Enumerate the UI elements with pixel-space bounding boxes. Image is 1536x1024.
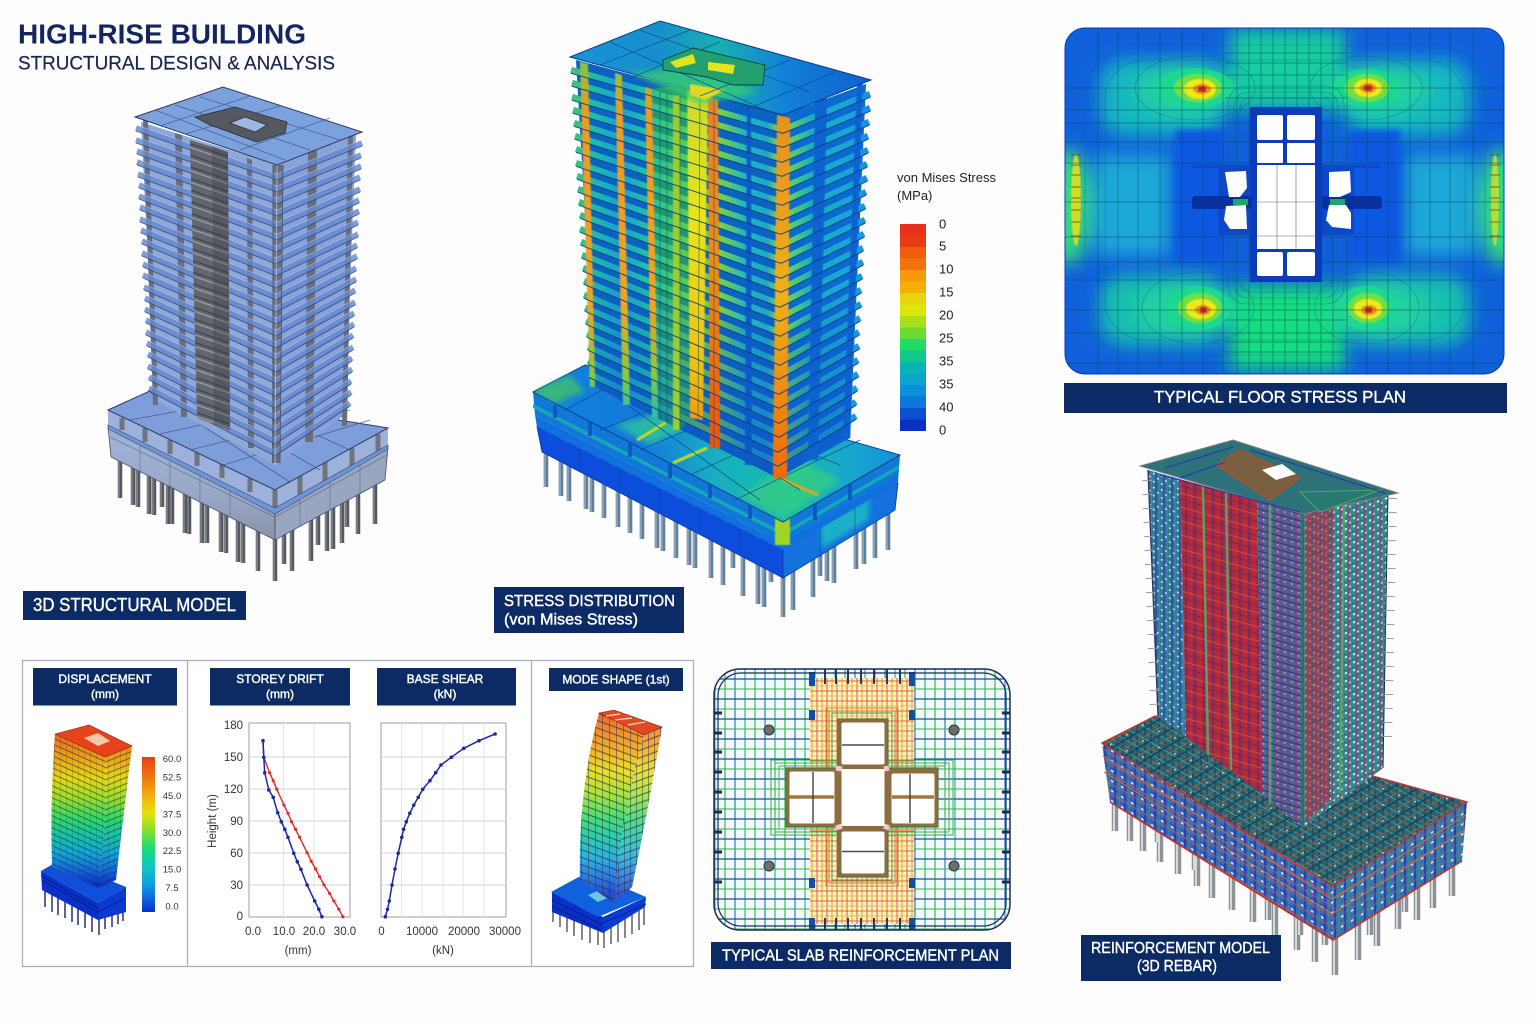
tower rebar cage <box>1148 470 1388 828</box>
y axis ticks <box>224 720 243 923</box>
label: typical floor stress plan <box>1064 383 1507 413</box>
slab wire ticks <box>1147 480 1392 750</box>
legend values: 40 <box>939 400 953 414</box>
outer left strip <box>1148 470 1186 737</box>
legend title: von Mises Stress <box>897 170 996 185</box>
results panel <box>22 660 694 966</box>
y axis ticks: 60 <box>230 848 243 860</box>
stress contour field <box>1044 28 1526 374</box>
podium roof cage <box>1102 716 1467 886</box>
header: storey drift: (mm) <box>266 687 294 701</box>
green vertical bars <box>1203 486 1344 828</box>
label: typical floor stress plan: TYPICAL FLOOR STRESS PLAN <box>1154 388 1406 406</box>
3D reinforcement model <box>1102 440 1467 975</box>
legend values: 0 <box>939 422 946 438</box>
legend values <box>939 216 953 438</box>
podium floor slabs <box>533 392 900 550</box>
roof slab with hot core <box>570 21 871 115</box>
right face <box>1303 491 1388 828</box>
legend values: 10 <box>939 262 953 276</box>
roof slab with core opening <box>135 87 362 165</box>
label: stress distribution: (von Mises Stress) <box>504 612 638 628</box>
x axis ticks: 0 <box>378 926 385 938</box>
displacement scale values: 22.5 <box>163 846 181 857</box>
podium roof with stress field <box>533 365 900 522</box>
legend color bar <box>900 224 926 431</box>
legend title: (MPa) <box>897 188 932 203</box>
y axis ticks: 30 <box>230 880 243 892</box>
legend values: 15 <box>939 284 953 300</box>
header: storey drift <box>210 668 350 706</box>
label: reinforcement model: REINFORCEMENT MODEL <box>1091 940 1270 957</box>
lower podium slab and columns <box>108 410 388 514</box>
displacement color bar <box>142 757 155 912</box>
legend title <box>897 170 996 203</box>
y axis ticks: 180 <box>224 720 243 732</box>
x axis ticks: 10.0 <box>273 926 295 938</box>
mode shape tower <box>551 710 662 948</box>
right red strip <box>1305 506 1333 822</box>
foundation piles <box>1114 771 1452 975</box>
legend values: 5 <box>939 238 946 254</box>
header: displacement <box>33 668 177 706</box>
base shear curve <box>385 734 495 917</box>
displacement tower model <box>41 725 132 935</box>
core shaft <box>1192 107 1382 282</box>
displacement scale values: 7.5 <box>165 883 179 894</box>
mixed strip <box>1257 500 1303 828</box>
tower body <box>571 60 870 478</box>
displacement scale values <box>163 754 181 912</box>
y axis ticks: 90 <box>230 816 243 828</box>
label: stress distribution <box>494 587 684 633</box>
basement box <box>108 427 388 540</box>
podium side cages <box>1102 743 1467 940</box>
legend values: 0 <box>939 216 946 232</box>
central core wall <box>190 140 230 430</box>
displacement scale values: 0.0 <box>165 902 179 912</box>
stressed columns <box>580 62 863 478</box>
label: typical slab reinforcement plan: TYPICAL SLAB REINFORCEMENT PLAN <box>722 948 999 964</box>
stress distribution building <box>533 21 900 617</box>
edge column ties <box>812 672 912 930</box>
nested rebar rings <box>771 708 953 886</box>
tower roof cage <box>1140 440 1398 514</box>
blue drift curve <box>263 741 322 917</box>
legend values: 35 <box>939 376 953 392</box>
header: base shear: BASE SHEAR <box>407 672 484 686</box>
structural grid lines <box>1065 28 1504 374</box>
y axis ticks: 120 <box>224 784 243 796</box>
y axis ticks: 0 <box>237 911 243 923</box>
floor slabs colored by stress <box>571 70 870 463</box>
x axis ticks: 20000 <box>448 926 480 938</box>
red core strip <box>1180 479 1262 794</box>
x axis ticks: 30000 <box>489 926 521 938</box>
legend values: 25 <box>939 330 953 346</box>
podium wire frame <box>1103 756 1466 914</box>
header: displacement: DISPLACEMENT <box>58 672 152 686</box>
base shear chart <box>378 723 521 957</box>
x axis ticks: 0.0 <box>245 926 261 938</box>
core walls with openings <box>786 719 938 877</box>
label: reinforcement model <box>1081 935 1281 981</box>
header: mode shape: MODE SHAPE (1st) <box>562 672 670 686</box>
height axis label: Height (m) <box>207 794 219 848</box>
header: base shear: (kN) <box>434 687 456 701</box>
header: mode shape <box>549 668 683 691</box>
tower columns <box>143 120 353 463</box>
main title: HIGH-RISE BUILDING <box>18 18 306 50</box>
displacement scale values: 45.0 <box>163 791 181 802</box>
header: displacement: (mm) <box>91 687 119 701</box>
slab outline <box>714 669 1010 930</box>
header: base shear <box>377 668 516 706</box>
x axis ticks: 20.0 <box>303 926 325 938</box>
displacement scale values: 52.5 <box>163 772 181 784</box>
header: storey drift: STOREY DRIFT <box>236 672 324 686</box>
typical slab reinforcement plan <box>714 669 1010 932</box>
displacement scale values: 30.0 <box>163 828 181 839</box>
legend values: 35 <box>939 354 953 368</box>
foundation piles <box>119 438 375 581</box>
x axis ticks <box>378 926 521 938</box>
label: 3D structural model: 3D STRUCTURAL MODEL <box>33 595 236 615</box>
storey drift chart <box>207 720 356 957</box>
label: typical slab reinforcement plan <box>711 942 1011 969</box>
3D structural model building <box>108 87 388 581</box>
tower body <box>136 120 362 465</box>
central orange rebar strip <box>810 678 914 924</box>
displacement scale values: 37.5 <box>163 810 181 820</box>
basement box <box>537 427 898 578</box>
stress hot spots <box>1071 68 1499 330</box>
title block <box>18 18 335 74</box>
corner columns <box>764 725 959 871</box>
displacement scale values: 15.0 <box>163 864 181 876</box>
subtitle: STRUCTURAL DESIGN & ANALYSIS <box>18 54 335 74</box>
side rebar ticks <box>1071 155 1500 236</box>
x axis ticks: 30.0 <box>334 926 356 938</box>
legend values: 20 <box>939 308 953 322</box>
x axis ticks <box>245 926 356 938</box>
slab rebar field <box>714 669 1010 932</box>
label: reinforcement model: (3D REBAR) <box>1137 958 1217 975</box>
typical floor stress plan <box>1044 28 1526 374</box>
foundation piles <box>545 427 888 617</box>
y axis ticks: 150 <box>224 752 243 764</box>
displacement scale values: 60.0 <box>163 754 181 765</box>
x axis title: (kN) <box>432 945 454 957</box>
fade to lower stress near base <box>590 265 855 478</box>
contour lines <box>1085 45 1485 355</box>
label: stress distribution: STRESS DISTRIBUTION <box>504 593 675 610</box>
x axis ticks: 10000 <box>406 926 438 938</box>
panel frame with dividers <box>22 660 694 966</box>
podium roof slab <box>108 390 388 490</box>
von Mises legend <box>897 170 996 438</box>
label: 3D structural model <box>23 591 246 620</box>
red drift curve <box>263 741 343 917</box>
axis titles: (mm) <box>285 945 312 957</box>
core partition walls <box>842 745 884 852</box>
green core window band <box>652 84 690 430</box>
